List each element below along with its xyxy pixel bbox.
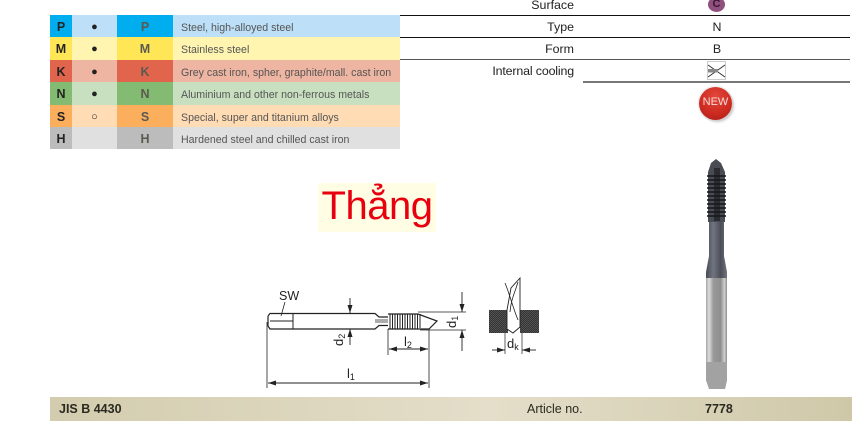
row: M stainless: Stainless steel <box>181 44 249 56</box>
panel: specification table <box>400 0 850 83</box>
row: K cast iron: K <box>140 65 150 79</box>
row: S special alloys <box>50 105 400 127</box>
label: SW: SW <box>279 289 299 303</box>
standard: JIS B 4430: JIS B 4430 <box>59 402 122 416</box>
shank <box>706 272 727 389</box>
drill hole section view: k <box>514 342 519 352</box>
value: type: N <box>713 20 721 34</box>
illustration: coated tap photo <box>706 159 727 389</box>
panel: material table <box>50 15 400 149</box>
row: P steel: Steel, high-alloyed steel <box>181 22 293 34</box>
row: H hardened: H <box>56 132 66 146</box>
row: S special alloys: ○ <box>91 111 98 123</box>
dimension: d1: d <box>444 321 459 328</box>
icon: surface coating C <box>708 0 725 12</box>
icon: NEW badge <box>699 87 732 120</box>
row: S special alloys: S <box>57 110 65 124</box>
row: S special alloys: Special, super and titanium alloys <box>181 112 339 124</box>
label: SW <box>279 289 299 316</box>
tap side view <box>267 312 466 388</box>
dimension: d2: 2 <box>337 334 347 339</box>
icon: NEW badge: NEW <box>703 96 728 108</box>
dimension: d1: 1 <box>450 316 460 321</box>
value: article number: 7778 <box>705 402 733 416</box>
row: M stainless <box>50 37 400 60</box>
value: form: B <box>713 42 721 56</box>
row: M stainless: M <box>56 42 66 56</box>
dimension: l1: 1 <box>350 372 355 382</box>
dimension: d2: d <box>331 339 346 346</box>
row: H hardened: Hardened steel and chilled cast iron <box>181 134 349 146</box>
row: M stainless: M <box>140 42 150 56</box>
dimension: l2: 2 <box>407 340 412 350</box>
threaded head <box>708 159 725 222</box>
label: form: Form <box>545 42 574 56</box>
row: P steel: P <box>57 20 65 34</box>
row: S special alloys: S <box>141 110 149 124</box>
icon: no internal cooling <box>707 61 726 80</box>
row: H hardened <box>50 127 400 149</box>
label: type: Type <box>547 20 574 34</box>
row: P steel <box>50 15 400 37</box>
row: K cast iron: ● <box>91 66 98 78</box>
dimension: l2: l <box>404 334 407 349</box>
row: P steel: ● <box>91 21 98 33</box>
row: N non-ferrous: ● <box>91 88 98 100</box>
title: Thẳng: Thẳng <box>322 184 432 228</box>
dimension: d2 <box>331 298 350 346</box>
row: K cast iron: Grey cast iron, spher, graphite/mall. cast iron <box>181 67 391 79</box>
row: N non-ferrous <box>50 82 400 105</box>
coated neck <box>706 222 727 278</box>
row: K cast iron: K <box>56 65 66 79</box>
label: article no: Article no. <box>527 402 583 416</box>
drill hole section view <box>489 278 539 354</box>
dimension: l1 <box>268 366 428 383</box>
row: P steel: P <box>141 20 149 34</box>
label: internal cooling: Internal cooling <box>492 64 574 78</box>
dimension: l1: l <box>347 366 350 381</box>
drill hole section view: d <box>507 336 514 351</box>
row: M stainless: ● <box>91 43 98 55</box>
footer bar <box>50 397 852 421</box>
row: K cast iron <box>50 60 400 82</box>
extension lines <box>267 312 466 388</box>
dimension: l2 <box>389 334 428 350</box>
row: H hardened: H <box>140 132 150 146</box>
row: N non-ferrous: N <box>56 87 66 101</box>
dimension: d1 <box>444 292 462 351</box>
row: N non-ferrous: N <box>140 87 150 101</box>
row: N non-ferrous: Aluminium and other non-ferrous metals <box>181 89 369 101</box>
